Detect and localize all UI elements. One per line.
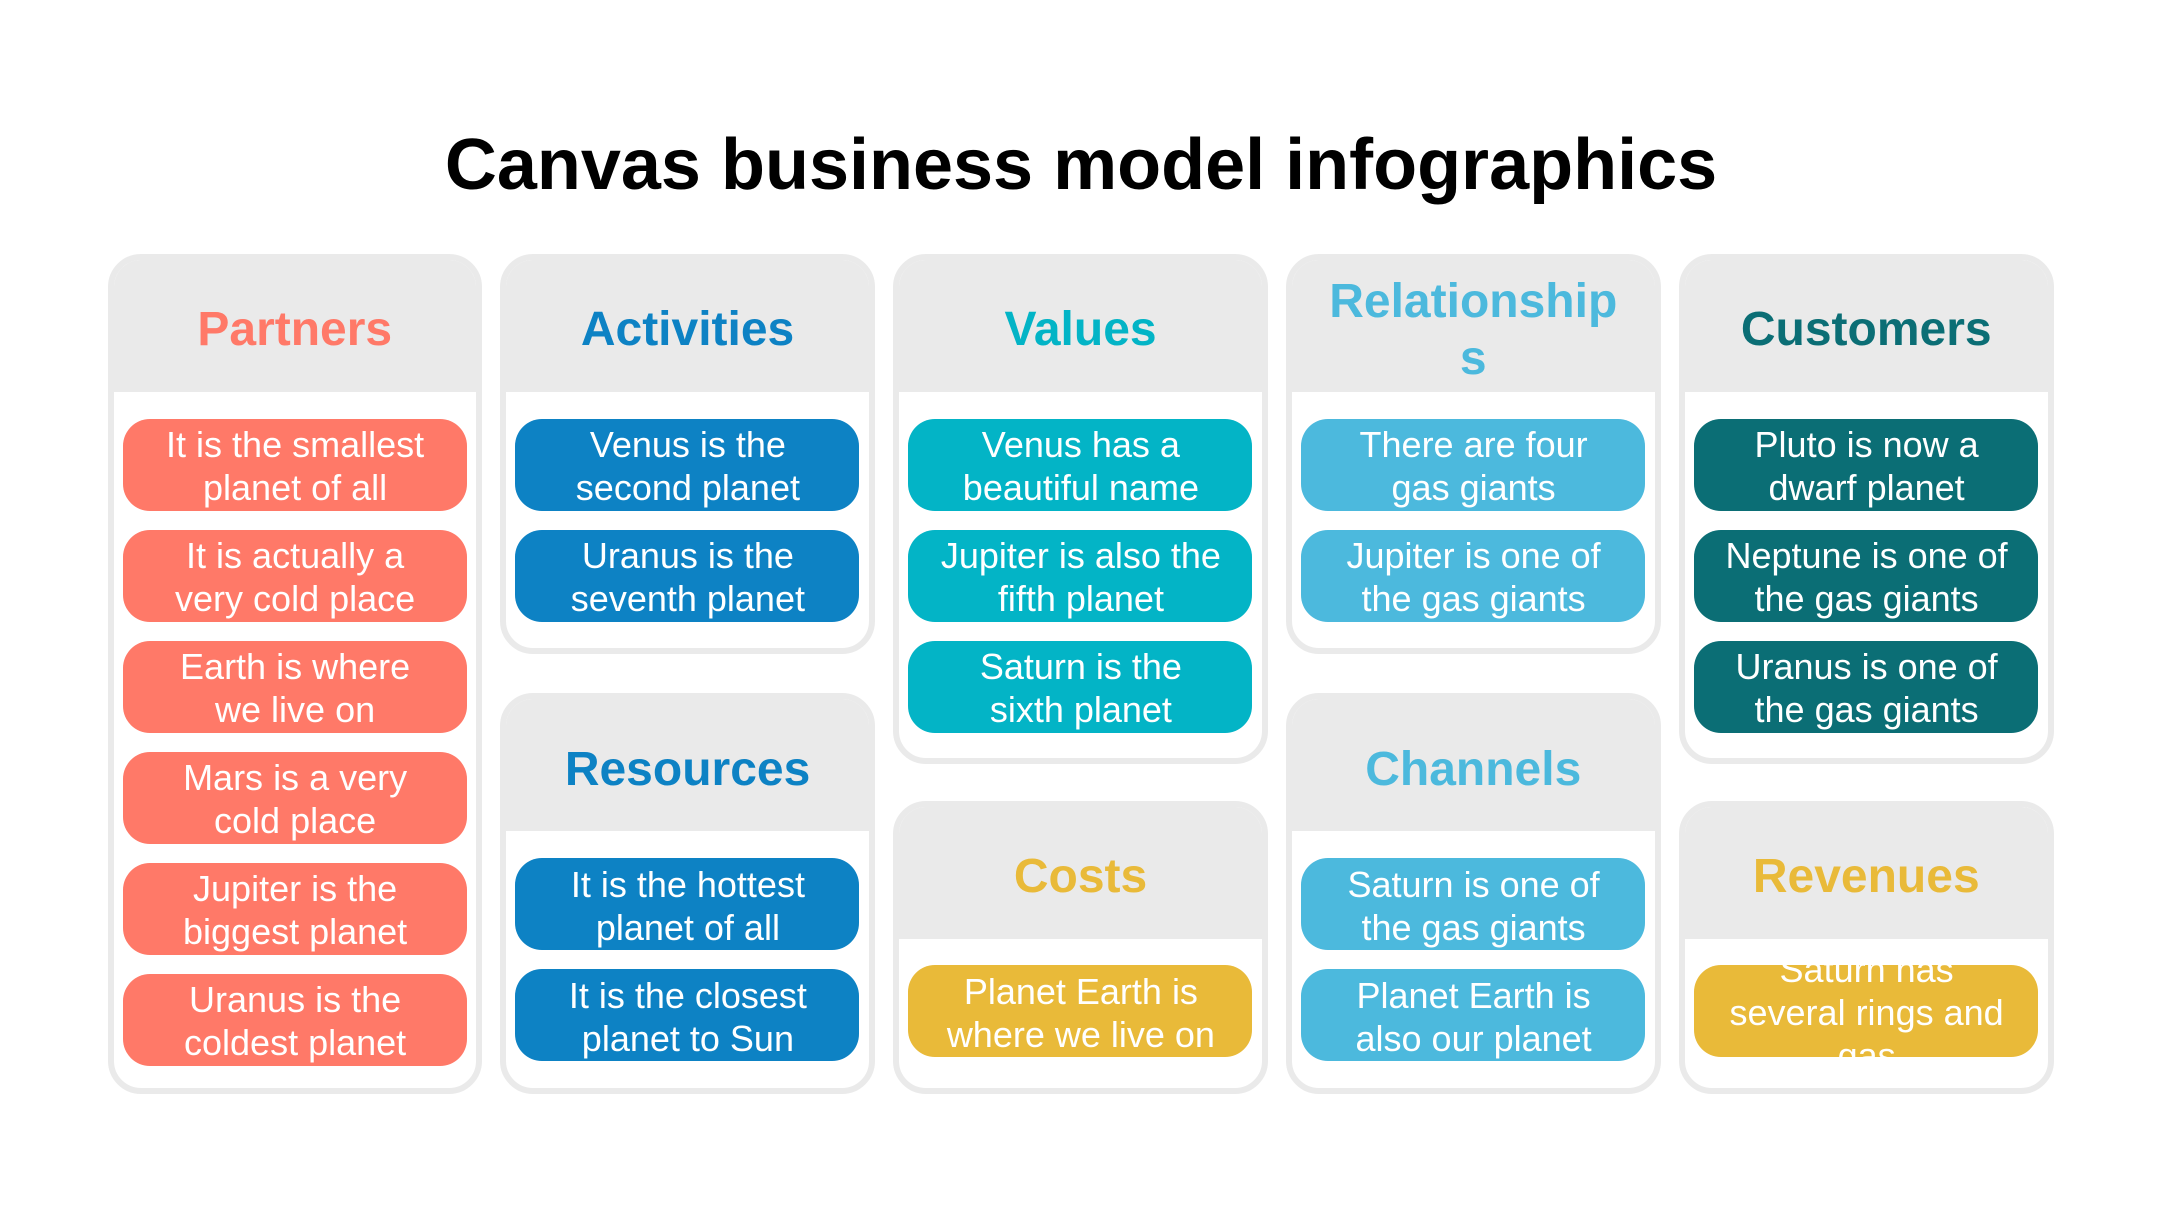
item: uranus: seventh planet [571,578,805,619]
item: jupiter: fifth planet [998,578,1164,619]
item: earth: we live on [215,689,375,730]
item: smallest planet: planet of all [203,467,387,508]
heading: relationships: s [1460,332,1487,385]
item: earth: also our planet [1356,1018,1592,1059]
item: earth: Earth is where [180,646,410,687]
heading: partners [114,260,476,392]
heading: costs: Costs [1014,850,1147,903]
panel: relationships [1286,254,1660,654]
item: saturn: Saturn is one of [1348,864,1600,905]
item: mars: cold place [214,800,376,841]
heading: revenues: Revenues [1753,850,1980,903]
item: smallest planet [123,419,467,511]
item: jupiter: biggest planet [183,911,407,952]
panel: revenues [1679,801,2054,1094]
item: jupiter [123,863,467,955]
item: earth: where we live on [947,1014,1215,1055]
heading: relationships: Relationship [1329,275,1617,328]
item: cold place: It is actually a [186,535,404,576]
item: venus [908,419,1252,511]
item: saturn [908,641,1252,733]
item: uranus: Uranus is one of [1736,646,1998,687]
item: cold place [123,530,467,622]
item: uranus: coldest planet [184,1022,406,1063]
item: earth [123,641,467,733]
item: neptune [1694,530,2038,622]
panel: customers [1679,254,2054,764]
heading: resources [506,699,869,831]
heading: activities [506,260,869,392]
item: hottest planet [515,858,859,950]
item: pluto: dwarf planet [1769,467,1965,508]
item: uranus [515,530,859,622]
panel: channels [1286,693,1660,1094]
item: closest planet [515,969,859,1061]
item: earth: Planet Earth is [1357,975,1591,1016]
item: uranus: Uranus is the [582,535,794,576]
item: closest planet: planet to Sun [582,1018,794,1059]
item: gas giants: There are four [1360,424,1588,465]
item: gas giants [1301,419,1645,511]
heading: channels: Channels [1365,743,1581,796]
item: jupiter [1301,530,1645,622]
heading: customers [1685,260,2048,392]
panel: values [893,254,1268,764]
item: venus: second planet [576,467,800,508]
heading: values: Values [1004,303,1157,356]
item: earth [1301,969,1645,1061]
item: smallest planet: It is the smallest [166,424,424,465]
heading: customers: Customers [1741,303,1992,356]
heading: resources: Resources [565,743,810,796]
heading: channels [1292,699,1654,831]
item: saturn, clipped [1694,965,2038,1057]
item: mars: Mars is a very [183,757,407,798]
item: neptune: Neptune is one of [1725,535,2008,576]
item: jupiter: Jupiter is one of [1347,535,1601,576]
item: saturn [1301,858,1645,950]
item: hottest planet: It is the hottest [571,864,805,905]
item: pluto: Pluto is now a [1755,424,1979,465]
panel: activities [500,254,875,654]
item: saturn, clipped: several rings and [1730,992,2004,1033]
item: pluto [1694,419,2038,511]
heading: activities: Activities [581,303,794,356]
item: hottest planet: planet of all [596,907,780,948]
item: mars [123,752,467,844]
item: closest planet: It is the closest [569,975,807,1016]
item: jupiter [908,530,1252,622]
title: Canvas business model infographics [445,125,1717,205]
item: neptune: the gas giants [1754,578,1979,619]
item: venus: Venus has a [982,424,1180,465]
item: cold place: very cold place [175,578,415,619]
panel: resources [500,693,875,1094]
heading: partners: Partners [197,303,392,356]
item: saturn: the gas giants [1362,907,1586,948]
item: uranus [1694,641,2038,733]
heading: costs [899,807,1262,939]
panel: partners [108,254,482,1094]
item: uranus: the gas giants [1755,689,1979,730]
item: saturn: sixth planet [990,689,1172,730]
item: venus: Venus is the [590,424,786,465]
item: gas giants: gas giants [1392,467,1556,508]
item: jupiter: Jupiter is also the [941,535,1221,576]
item: earth: Planet Earth is [964,971,1198,1012]
heading: revenues [1685,807,2048,939]
heading: relationships [1292,260,1654,392]
item: jupiter: the gas giants [1362,578,1586,619]
item: venus: beautiful name [963,467,1199,508]
item: uranus [123,974,467,1066]
panel: costs [893,801,1268,1094]
heading: values [899,260,1262,392]
item: uranus: Uranus is the [189,979,401,1020]
item: saturn: Saturn is the [980,646,1182,687]
item: venus [515,419,859,511]
item: jupiter: Jupiter is the [193,868,397,909]
item: earth [908,965,1252,1057]
